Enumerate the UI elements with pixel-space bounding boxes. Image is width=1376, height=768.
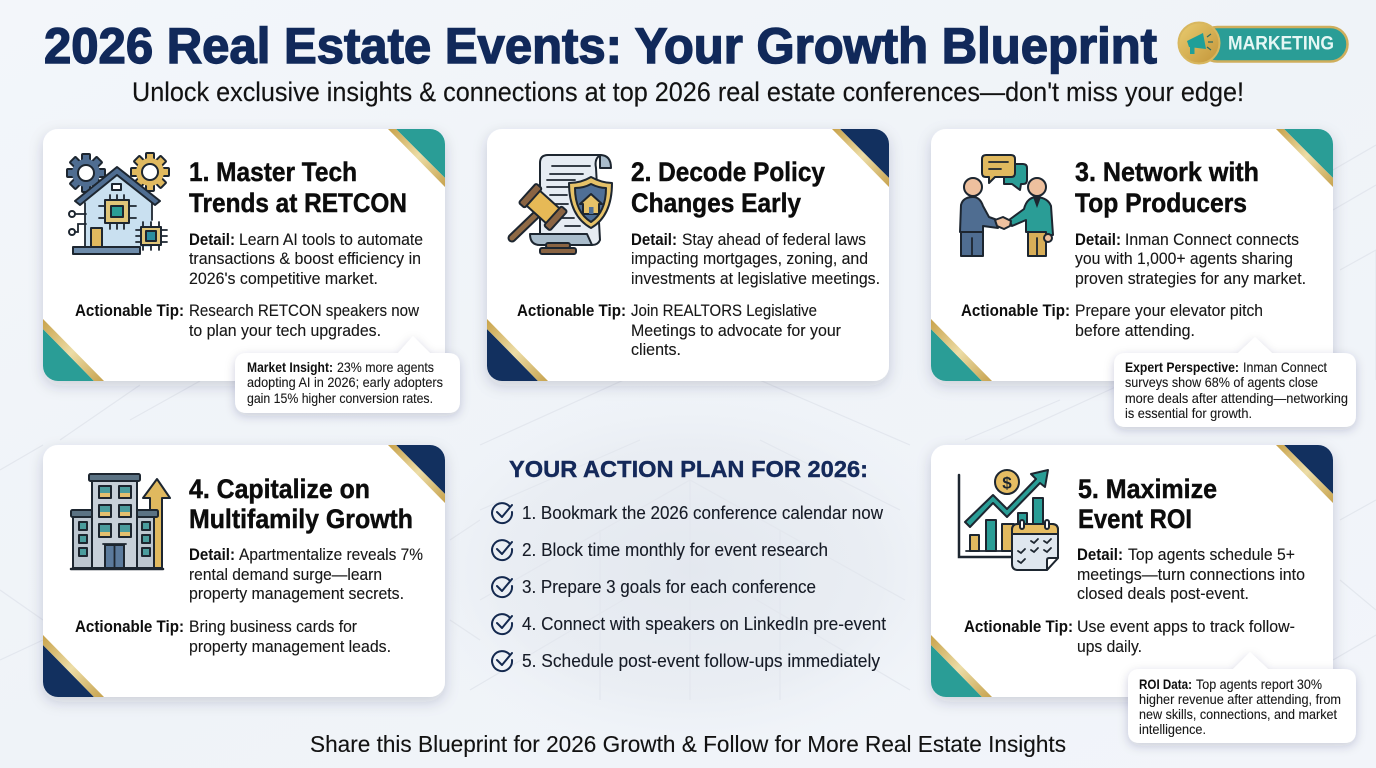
text block: detail: Stay ahead of federal laws: [682, 231, 866, 249]
subtitle: Unlock exclusive insights & connections at top 2026 real estate conferences—don't miss your edge!: [132, 77, 1244, 107]
heading: Event ROI: [1078, 504, 1192, 534]
text block: actionable tip: [75, 302, 419, 340]
text block: detail: Top agents schedule 5+: [1128, 546, 1295, 564]
heading: [189, 474, 413, 534]
text block: actionable tip: Meetings to advocate for your: [631, 322, 841, 340]
callout: roi data: intelligence.: [1139, 722, 1206, 737]
text block: actionable tip: before attending.: [1075, 322, 1195, 340]
text block: actionable tip: [517, 302, 841, 359]
text block: detail: Learn AI tools to automate: [239, 231, 423, 249]
text block: actionable tip: Bring business cards for: [189, 618, 357, 636]
callout: expert perspective: more deals after attending—networking: [1125, 391, 1348, 406]
heading: [189, 157, 407, 218]
callout: expert perspective: Inman Connect: [1243, 360, 1327, 375]
icon: smart house with gears and chips: [67, 153, 169, 254]
heading: Multifamily Growth: [189, 504, 413, 534]
callout: roi data: Top agents report 30%: [1196, 677, 1322, 692]
callout: expert perspective: [1114, 337, 1356, 427]
heading: [1078, 474, 1217, 534]
text block: detail: investments at legislative meetings.: [631, 270, 880, 288]
text block: actionable tip: clients.: [631, 341, 681, 359]
text block: detail: you with 1,000+ agents sharing: [1075, 250, 1293, 268]
panel: card 2: [487, 129, 889, 381]
text block: actionable tip: Actionable Tip:: [961, 302, 1070, 320]
icon: gavel, document and shield: [512, 155, 612, 254]
icon: growth chart with calendar: $: [1002, 474, 1012, 492]
text block: detail: [1077, 546, 1305, 603]
callout: market insight: Market Insight:: [247, 360, 333, 375]
callout: roi data: ROI Data:: [1139, 677, 1192, 692]
heading: 2. Decode Policy: [631, 157, 825, 187]
icon: handshake with speech bubbles: [960, 155, 1053, 256]
callout: expert perspective: Expert Perspective:: [1125, 360, 1239, 375]
checklist item 1: 1. Bookmark the 2026 conference calendar now: [522, 502, 884, 523]
text block: actionable tip: Actionable Tip:: [964, 618, 1073, 636]
text block: actionable tip: Actionable Tip:: [75, 618, 184, 636]
heading: [631, 157, 825, 218]
text block: actionable tip: Use event apps to track follow-: [1077, 618, 1295, 636]
text block: detail: 2026's competitive market.: [189, 270, 378, 288]
text block: actionable tip: [961, 302, 1263, 340]
panel: action plan: [492, 456, 886, 671]
badge: marketing: MARKETING: [1228, 34, 1334, 54]
callout: expert perspective: surveys show 68% of agents close: [1125, 375, 1318, 390]
heading: 4. Capitalize on: [189, 474, 370, 504]
text block: actionable tip: Join REALTORS Legislative: [631, 302, 817, 320]
text block: actionable tip: Prepare your elevator pitch: [1075, 302, 1263, 320]
text block: detail: transactions & boost efficiency in: [189, 250, 421, 268]
checklist item 4: 4. Connect with speakers on LinkedIn pre-event: [522, 613, 886, 634]
footer call to action: Share this Blueprint for 2026 Growth & Follow for More Real Estate Insights: [310, 731, 1066, 757]
text block: detail: proven strategies for any market.: [1075, 270, 1306, 288]
text block: actionable tip: property management leads.: [189, 638, 391, 656]
checklist item 3: 3. Prepare 3 goals for each conference: [522, 576, 816, 597]
text block: actionable tip: [75, 618, 391, 656]
callout: market insight: 23% more agents: [337, 360, 434, 375]
heading: 1. Master Tech: [189, 157, 357, 187]
text block: detail: Inman Connect connects: [1125, 231, 1299, 249]
icon: apartment building with growth arrow: [71, 474, 170, 569]
heading: 3. Network with: [1075, 157, 1259, 187]
callout: market insight: adopting AI in 2026; early adopters: [247, 375, 443, 390]
text block: detail: property management secrets.: [189, 585, 404, 603]
text block: actionable tip: ups daily.: [1077, 638, 1142, 656]
heading: action plan: YOUR ACTION PLAN FOR 2026:: [509, 456, 868, 482]
text block: detail: Detail:: [1077, 546, 1123, 564]
title: 2026 Real Estate Events: Your Growth Blueprint: [44, 18, 1157, 74]
text block: actionable tip: Actionable Tip:: [75, 302, 184, 320]
text block: detail: closed deals post-event.: [1077, 585, 1249, 603]
panel: card 1: [43, 129, 445, 381]
text block: actionable tip: Research RETCON speakers now: [189, 302, 419, 320]
text block: detail: [1075, 231, 1306, 288]
heading: Trends at RETCON: [189, 188, 407, 218]
text block: detail: [631, 231, 880, 288]
checklist item 5: 5. Schedule post-event follow-ups immediately: [522, 650, 881, 671]
panel: card 5: [931, 445, 1333, 697]
text block: detail: rental demand surge—learn: [189, 566, 382, 584]
panel: card 3: [931, 129, 1333, 381]
text block: detail: impacting mortgages, zoning, and: [631, 250, 868, 268]
callout: roi data: new skills, connections, and market: [1139, 707, 1337, 722]
text block: actionable tip: Actionable Tip:: [517, 302, 626, 320]
text block: actionable tip: [964, 618, 1295, 656]
text block: detail: Detail:: [189, 546, 235, 564]
callout: market insight: [235, 336, 460, 413]
text block: detail: Detail:: [631, 231, 677, 249]
callout: market insight: gain 15% higher conversion rates.: [247, 391, 433, 406]
panel: card 4: [43, 445, 445, 697]
heading: Changes Early: [631, 188, 801, 218]
checklist item 2: 2. Block time monthly for event research: [522, 539, 828, 560]
callout: expert perspective: is essential for growth.: [1125, 406, 1252, 421]
text block: detail: Detail:: [1075, 231, 1121, 249]
callout: roi data: higher revenue after attending, from: [1139, 692, 1341, 707]
heading: [1075, 157, 1259, 218]
icon: growth chart with calendar: [959, 470, 1058, 570]
text block: actionable tip: to plan your tech upgrades.: [189, 322, 381, 340]
callout: roi data: [1128, 652, 1356, 743]
text block: detail: [189, 231, 423, 288]
badge: marketing: [1178, 22, 1348, 64]
text block: detail: [189, 546, 423, 603]
heading: Top Producers: [1075, 188, 1247, 218]
text block: detail: meetings—turn connections into: [1077, 566, 1305, 584]
heading: 5. Maximize: [1078, 474, 1217, 504]
text block: detail: Apartmentalize reveals 7%: [239, 546, 423, 564]
text block: detail: Detail:: [189, 231, 235, 249]
